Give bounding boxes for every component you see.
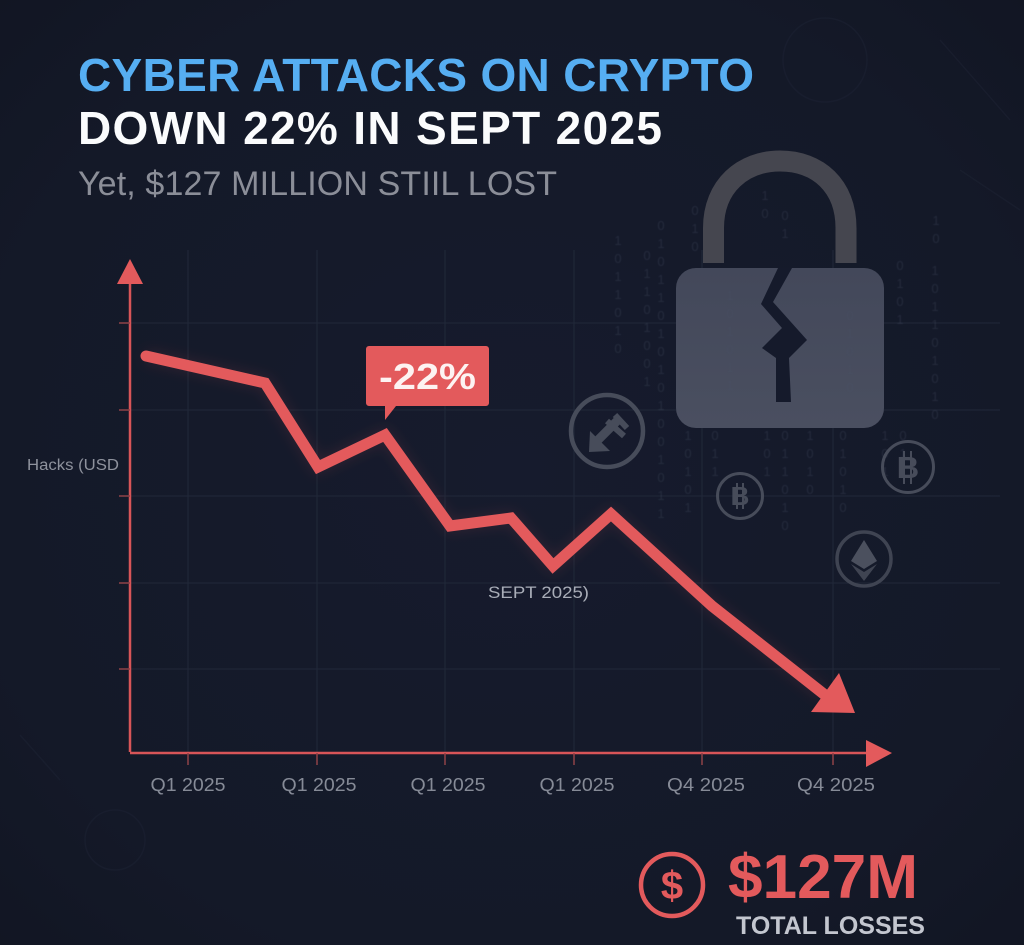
trend line glow (146, 356, 825, 695)
binary code background: 1 (691, 221, 699, 236)
total losses stat (641, 843, 925, 940)
binary code background: 0 (763, 446, 771, 461)
binary code background: 1 (657, 488, 665, 503)
binary code background: 0 (643, 248, 651, 263)
binary code background: 1 (899, 446, 907, 461)
binary code background: 0 (881, 446, 889, 461)
x axis labels: Q1 2025 (282, 775, 356, 795)
binary code background: 0 (726, 342, 734, 357)
binary code background: 1 (657, 236, 665, 251)
x axis labels: Q4 2025 (667, 775, 745, 795)
data label: Sept 2025: SEPT 2025) (488, 583, 589, 602)
binary code background: 0 (657, 344, 665, 359)
padlock shackle (714, 161, 846, 263)
binary code background: 0 (657, 416, 665, 431)
icon: bitcoin large: B (897, 450, 919, 485)
binary code background: 0 (643, 356, 651, 371)
binary code background: 1 (931, 353, 939, 368)
binary code background: 1 (806, 464, 814, 479)
binary code background: 0 (846, 308, 854, 323)
binary code background: 1 (931, 317, 939, 332)
total amount: $127M (728, 843, 918, 912)
binary code background: 1 (657, 452, 665, 467)
x axis labels (150, 775, 875, 795)
subtitle: Yet, $127 MILLION STIIL LOST (78, 165, 557, 203)
binary code background: 1 (896, 312, 904, 327)
binary code background: 1 (657, 398, 665, 413)
binary code background: 0 (839, 428, 847, 443)
binary code background: 0 (896, 294, 904, 309)
icon: broken padlock (676, 161, 884, 428)
binary code background: 0 (711, 428, 719, 443)
x axis labels: Q1 2025 (150, 775, 226, 795)
binary code background: 0 (614, 305, 622, 320)
binary code background: 1 (931, 263, 939, 278)
binary code background: 1 (711, 446, 719, 461)
binary code background: 0 (806, 482, 814, 497)
binary code background: 0 (657, 218, 665, 233)
binary code background: 0 (846, 344, 854, 359)
binary code background: 0 (896, 258, 904, 273)
binary code background: 0 (931, 335, 939, 350)
binary code background: 0 (684, 446, 692, 461)
binary code background: 1 (881, 428, 889, 443)
binary code background: 0 (657, 380, 665, 395)
binary code background: 0 (614, 341, 622, 356)
binary code background: 1 (763, 428, 771, 443)
binary code background: 1 (931, 389, 939, 404)
binary code background: 1 (932, 213, 940, 228)
binary code background: 1 (763, 464, 771, 479)
binary code background: 1 (684, 500, 692, 515)
binary code background: 0 (806, 446, 814, 461)
binary code background: 0 (781, 518, 789, 533)
icon: bitcoin small: B (731, 481, 749, 511)
icon: dollar coin: $ (661, 864, 683, 908)
binary code background: 0 (846, 380, 854, 395)
binary code background: 1 (614, 287, 622, 302)
binary code background: 0 (657, 308, 665, 323)
binary code background: 1 (896, 276, 904, 291)
binary code background: 1 (781, 446, 789, 461)
binary code background: 1 (643, 374, 651, 389)
binary code background: 0 (726, 306, 734, 321)
binary code background: 1 (657, 272, 665, 287)
binary code background: 1 (881, 464, 889, 479)
padlock crack (761, 268, 807, 402)
callout: -22%: -22% (379, 356, 476, 397)
binary code background: 1 (839, 482, 847, 497)
binary code background: 0 (781, 428, 789, 443)
icon: arrow coin (571, 395, 643, 467)
binary code background: 0 (657, 470, 665, 485)
binary code background: 1 (684, 464, 692, 479)
x axis (130, 740, 892, 767)
binary code background: 0 (781, 208, 789, 223)
x axis labels: Q1 2025 (540, 775, 614, 795)
binary code background: 1 (726, 324, 734, 339)
binary code background: 1 (614, 269, 622, 284)
binary code background: 0 (657, 254, 665, 269)
icon: bitcoin small (718, 474, 762, 518)
title: DOWN 22% IN SEPT 2025 (78, 102, 662, 154)
binary code background: 1 (643, 320, 651, 335)
binary code background: 1 (643, 284, 651, 299)
binary code background: 1 (781, 464, 789, 479)
binary code background: 0 (899, 428, 907, 443)
title: CYBER ATTACKS ON CRYPTO (78, 49, 754, 101)
y axis (117, 259, 143, 752)
trend line (146, 356, 855, 713)
binary code background: 1 (781, 226, 789, 241)
binary code background: 0 (614, 251, 622, 266)
binary code background: 1 (761, 188, 769, 203)
binary code background: 1 (846, 362, 854, 377)
binary code background (614, 188, 940, 533)
line chart (27, 259, 892, 795)
binary code background: 1 (726, 288, 734, 303)
binary code background: 1 (657, 362, 665, 377)
binary code background: 1 (726, 360, 734, 375)
x axis labels: Q4 2025 (797, 775, 875, 795)
binary code background: 1 (657, 506, 665, 521)
y axis label: Hacks (USD (27, 457, 119, 474)
binary code background: 1 (726, 378, 734, 393)
binary code background: 0 (643, 302, 651, 317)
binary code background: 1 (711, 464, 719, 479)
binary code background: 1 (657, 326, 665, 341)
binary code background: 1 (657, 290, 665, 305)
callout: -22% (366, 346, 489, 420)
binary code background: 0 (781, 482, 789, 497)
title (78, 49, 754, 154)
binary code background: 0 (684, 482, 692, 497)
binary code background: 0 (657, 434, 665, 449)
binary code background: 0 (761, 206, 769, 221)
binary code background: 1 (806, 428, 814, 443)
padlock body (676, 268, 884, 428)
binary code background: 0 (691, 239, 699, 254)
binary code background: 0 (643, 338, 651, 353)
binary code background: 1 (931, 299, 939, 314)
binary code background: 1 (846, 326, 854, 341)
icon: ethereum (837, 532, 891, 586)
binary code background: 1 (781, 500, 789, 515)
binary code background: 0 (839, 464, 847, 479)
binary code background: 1 (614, 233, 622, 248)
icon: dollar coin (641, 854, 703, 916)
icon: bitcoin large (882, 442, 934, 492)
binary code background: 0 (931, 407, 939, 422)
binary code background: 1 (643, 266, 651, 281)
binary code background: 1 (684, 428, 692, 443)
binary code background: 0 (839, 500, 847, 515)
x axis labels: Q1 2025 (410, 775, 486, 795)
binary code background: 0 (931, 371, 939, 386)
binary code background: 0 (932, 231, 940, 246)
binary code background: 0 (691, 203, 699, 218)
binary code background: 0 (931, 281, 939, 296)
binary code background: 1 (614, 323, 622, 338)
binary code background: 1 (899, 464, 907, 479)
total label: TOTAL LOSSES (736, 912, 925, 940)
binary code background: 1 (839, 446, 847, 461)
